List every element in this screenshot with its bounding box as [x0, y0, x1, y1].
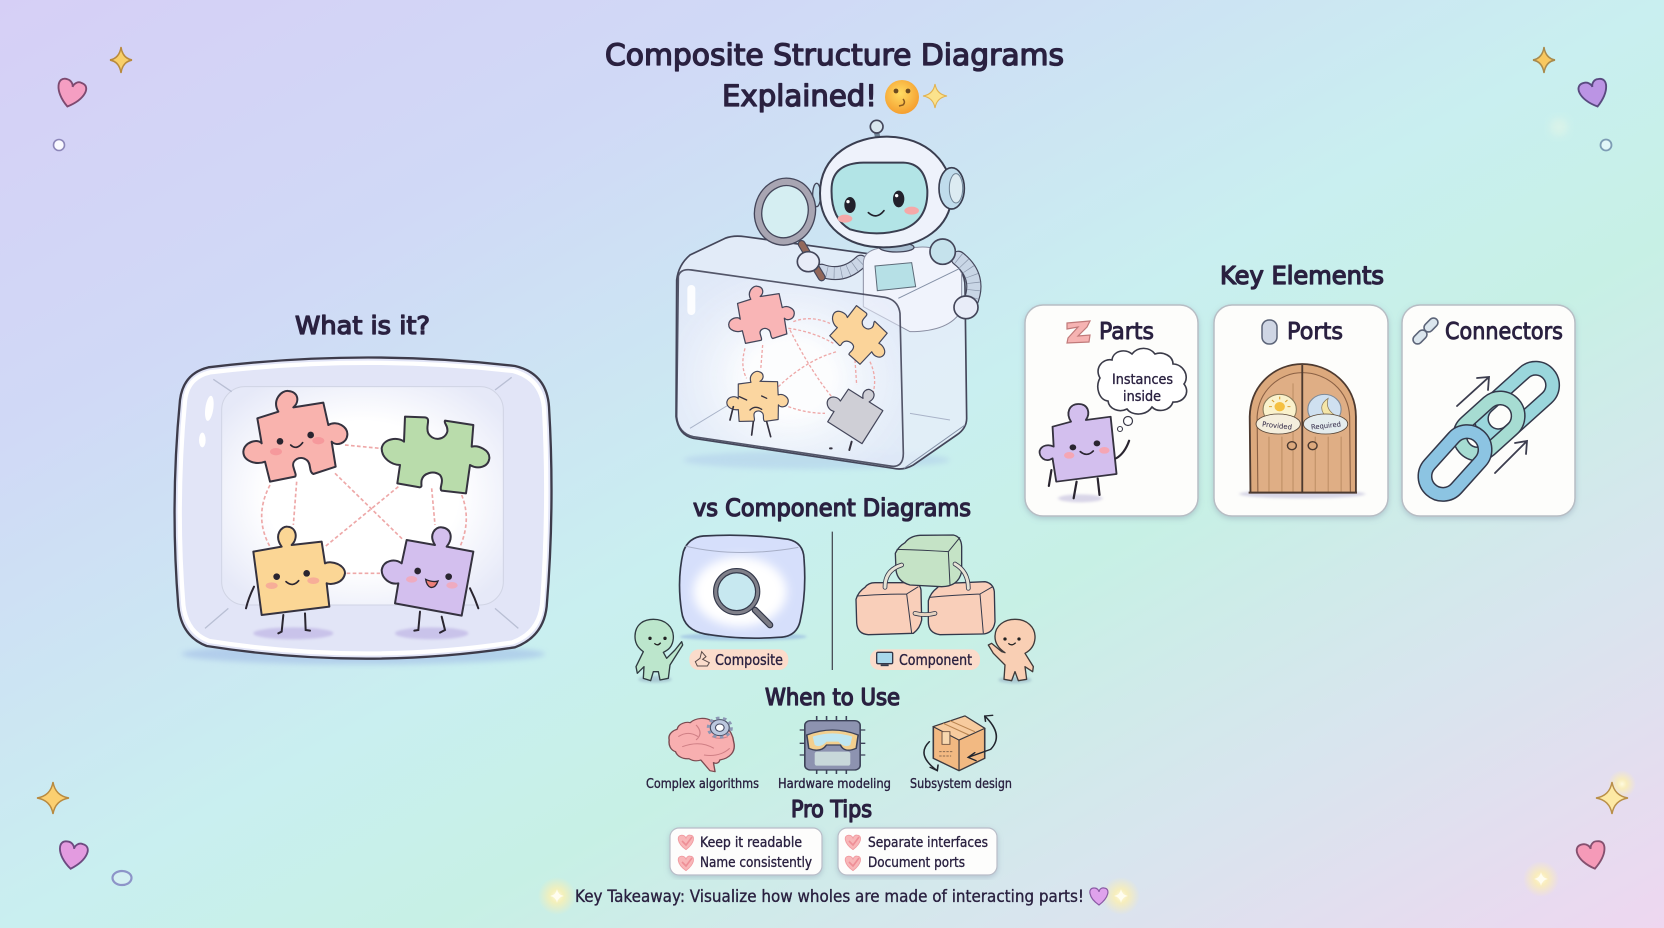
panel: Parts card: [1025, 305, 1198, 516]
heading: Pro Tips: Pro Tips: [791, 797, 872, 823]
label: Component: Component: [899, 651, 972, 669]
door labels: Provided: [1262, 420, 1292, 432]
puzzle piece: green: [382, 417, 489, 493]
label: Composite: Composite: [715, 651, 783, 669]
pill: Composite: [689, 649, 788, 670]
key takeaway: [538, 877, 1140, 915]
component cubes: [856, 535, 995, 635]
title: Composite Structure Diagrams: [605, 38, 1064, 72]
container frame: [175, 357, 552, 659]
icon: purple heart: [1090, 888, 1108, 905]
panel: Parts card: Parts: [1099, 319, 1154, 345]
panel: vs comparison: [635, 532, 1035, 683]
title: [605, 38, 1064, 114]
cube puzzle piece: pink: [729, 286, 794, 343]
icon: title sparkle: [923, 84, 947, 108]
icon: chip with goggles: [800, 716, 865, 774]
heading: Key Elements: Key Elements: [1220, 261, 1384, 290]
dashed connectors: [262, 445, 466, 573]
puzzle piece: purple: [382, 527, 478, 633]
title: Explained!: [722, 79, 877, 113]
magnifying glass: [751, 176, 822, 277]
panel: Ports card: Ports: [1287, 319, 1343, 345]
panel: tips card right: Separate interfaces: [868, 835, 988, 851]
character: purple puzzle piece: [1040, 404, 1129, 502]
thought bubble: Instances inside: [1098, 348, 1187, 432]
glass cube front: [677, 270, 903, 466]
puzzle piece: yellow: [246, 527, 345, 633]
key takeaway: Key Takeaway: Visualize how wholes are made of interacting parts!: [575, 887, 1084, 906]
icon: parts Z: [1067, 321, 1090, 343]
puzzle piece: red: [243, 391, 347, 482]
panel: tips card left: [670, 828, 822, 875]
icon: monitor: [877, 652, 893, 665]
cube puzzle piece: gray: [817, 376, 888, 450]
panel: Connectors card: [1402, 305, 1575, 516]
pill: Component: [870, 649, 980, 670]
icon: thinking emoji: [885, 80, 919, 114]
glass cube back: [676, 236, 967, 469]
panel: Ports card: Required: [1311, 420, 1341, 432]
icon: small link: [1411, 316, 1440, 346]
panel: tips card left: Keep it readable: [700, 835, 802, 851]
robot: [813, 120, 978, 332]
panel: tips card right: [838, 828, 997, 875]
icon: cardboard box: [924, 715, 996, 771]
label: Hardware modeling: Hardware modeling: [778, 777, 891, 792]
icon: port: [1262, 320, 1277, 344]
heading: vs Component Diagrams: vs Component Diagrams: [693, 494, 971, 522]
arrows: [1457, 377, 1527, 473]
thought bubble: Instances inside: inside: [1123, 389, 1161, 405]
panel: robot inspecting glass cube: [676, 120, 978, 469]
icon: composite: [695, 652, 709, 666]
heading: When to Use: When to Use: [765, 685, 900, 711]
icons: when to use: [669, 715, 996, 774]
panel: Ports card: [1214, 305, 1388, 516]
composite box with magnifier: [680, 535, 807, 641]
cube puzzle piece: orange: [819, 298, 898, 372]
panel: tips card right: Document ports: [868, 855, 965, 871]
thought bubble: Instances inside: Instances: [1112, 372, 1173, 388]
character: green: [635, 619, 683, 683]
heading: What is it?: What is it?: [295, 311, 430, 340]
wooden door: [1239, 364, 1365, 498]
panel: Connectors card: Connectors: [1445, 319, 1563, 345]
icons: check hearts: [845, 835, 861, 871]
cube puzzle piece: sad: [724, 367, 792, 437]
label: Complex algorithms: Complex algorithms: [646, 777, 759, 792]
cube dashed connectors: [743, 319, 875, 413]
chain links: [1418, 361, 1560, 502]
icons: check hearts: [678, 835, 694, 871]
panel: tips card left: Name consistently: [700, 855, 812, 871]
panel: what is it glass container: [175, 357, 552, 665]
character: peach: [988, 619, 1035, 683]
label: Subsystem design: Subsystem design: [910, 777, 1012, 792]
icon: brain with gear: [669, 718, 734, 772]
